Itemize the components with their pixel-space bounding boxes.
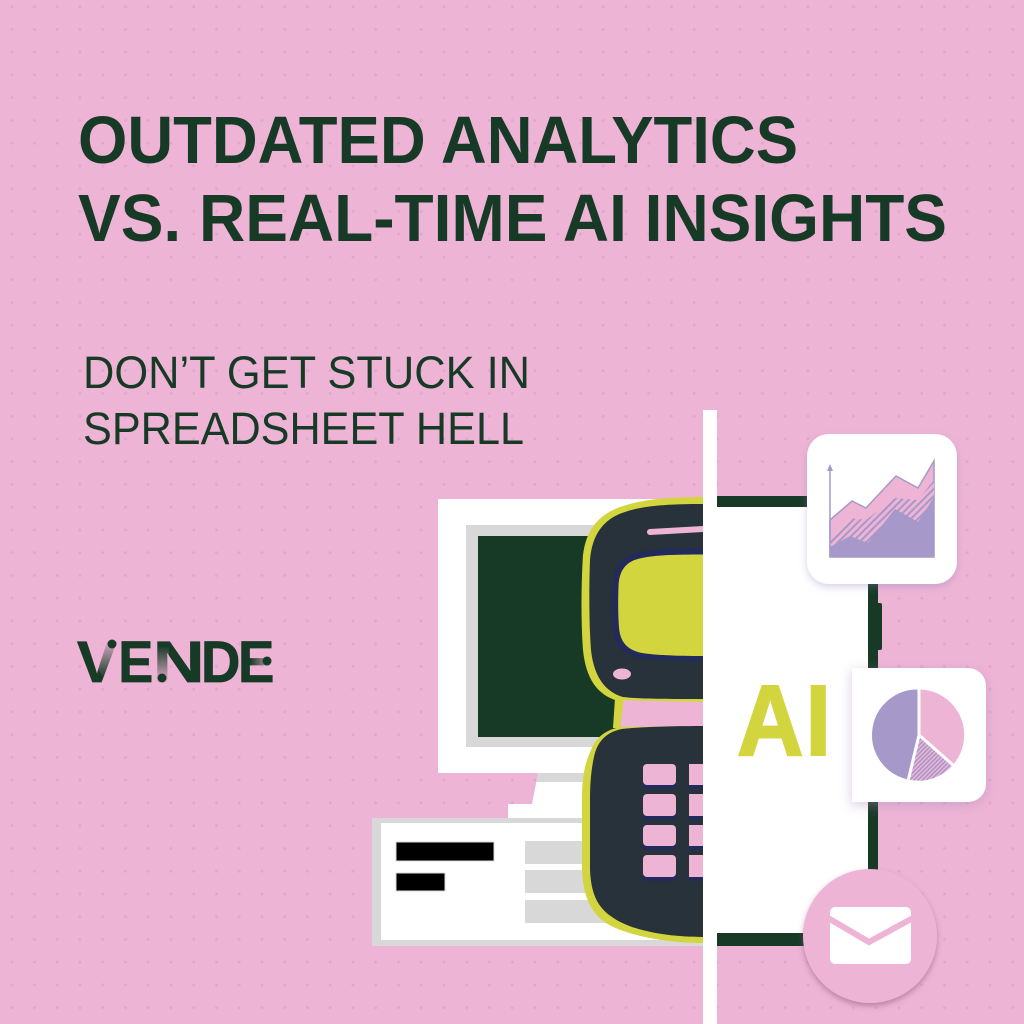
logo: Vende: E — [238, 629, 274, 694]
modern smartphone — [717, 496, 882, 946]
AI label: AI — [737, 665, 831, 777]
logo: Vende: D — [201, 629, 240, 694]
icon: mail button — [803, 869, 937, 1003]
subtitle: SPREADSHEET HELL — [83, 403, 524, 454]
logo: Vende — [77, 629, 275, 695]
title — [78, 103, 947, 256]
subtitle — [83, 347, 530, 454]
divider line — [703, 410, 717, 1024]
card: area chart — [807, 434, 957, 584]
title: OUTDATED ANALYTICS — [78, 103, 798, 178]
old desktop computer — [372, 499, 703, 946]
logo: Vende: E — [118, 629, 153, 695]
card: pie chart — [852, 668, 986, 802]
retro phone — [582, 497, 703, 943]
title: VS. REAL-TIME AI INSIGHTS — [78, 181, 947, 256]
logo: Vende: N — [153, 629, 205, 694]
subtitle: DON’T GET STUCK IN — [83, 347, 530, 398]
logo: Vende: V — [77, 631, 117, 695]
